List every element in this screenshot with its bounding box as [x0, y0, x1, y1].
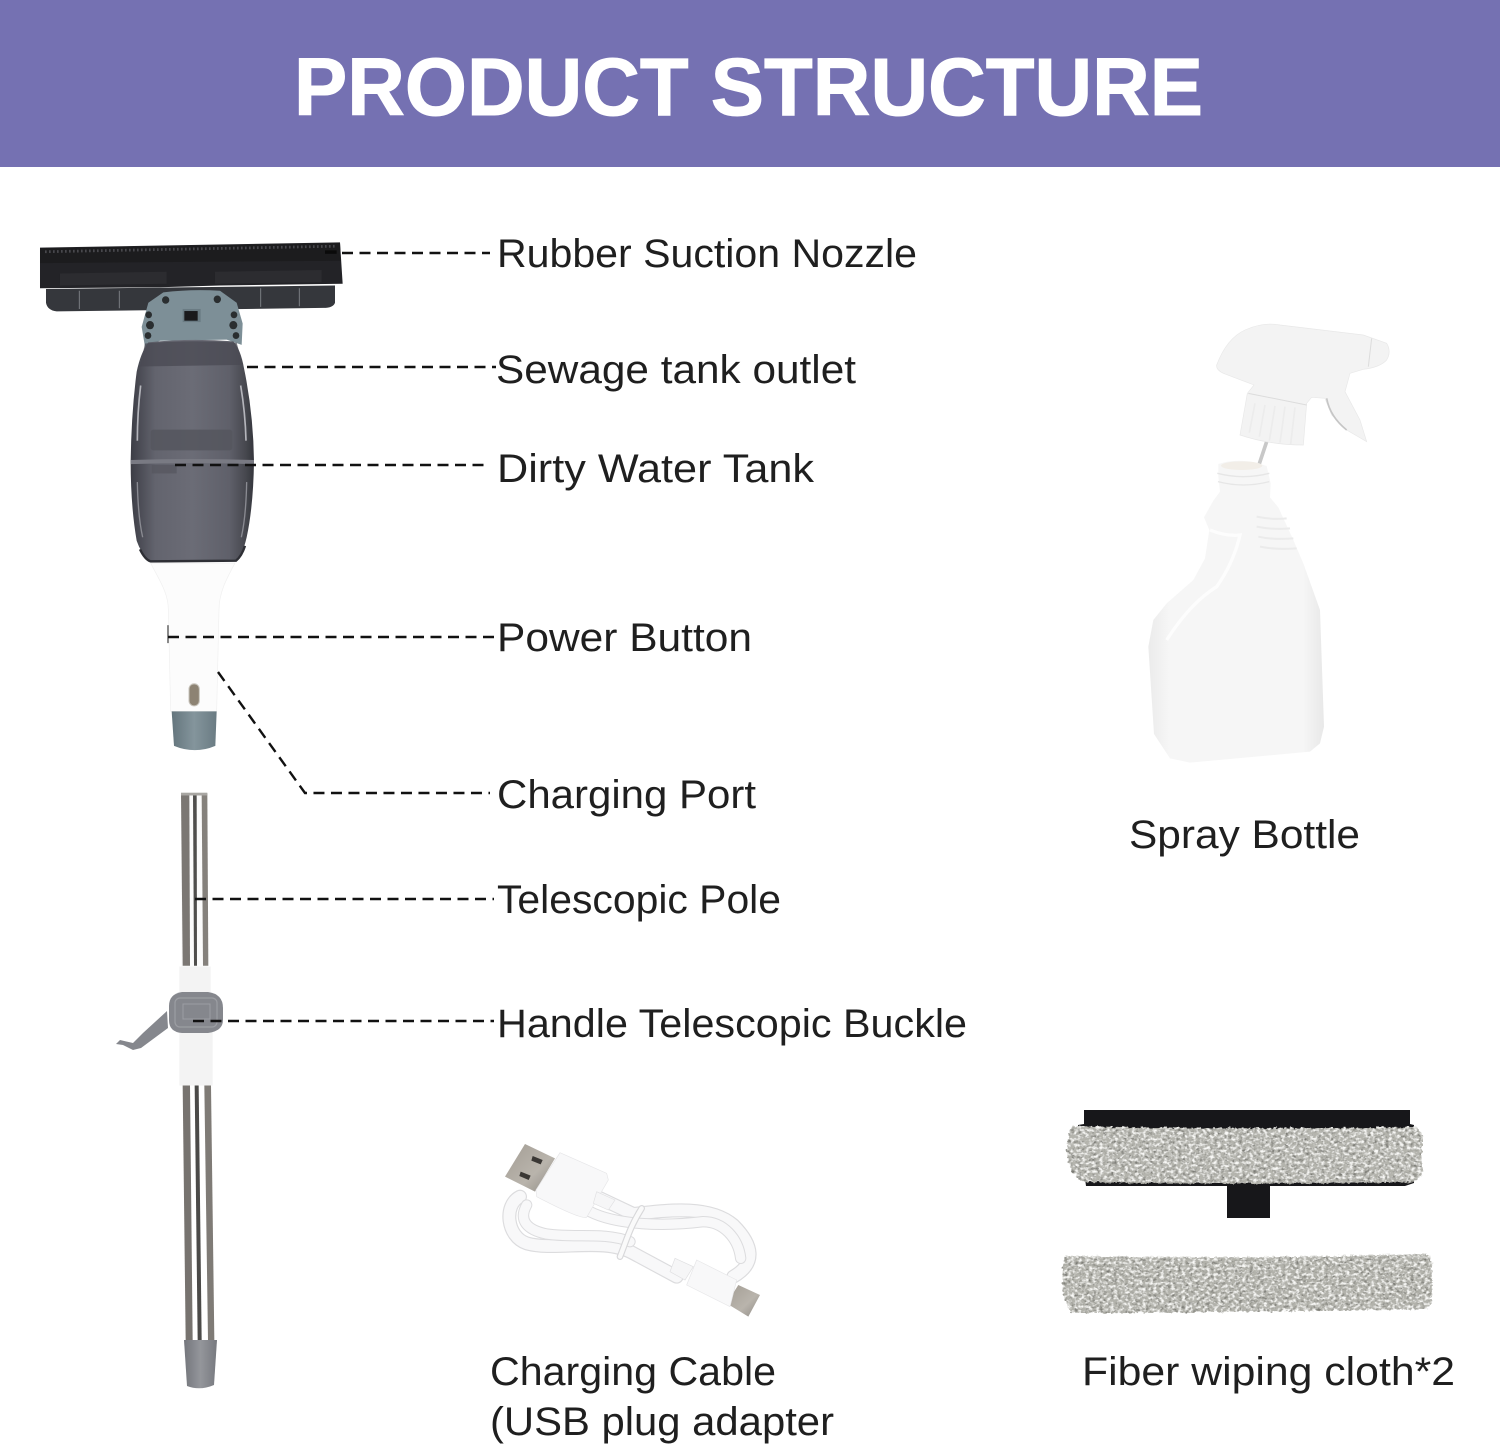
telescopic collars — [179, 967, 213, 1086]
label: charging cable: (USB plug adapter — [490, 1400, 834, 1444]
product: spare wiping cloth — [1062, 1254, 1432, 1313]
product: spray bottle — [1148, 324, 1389, 763]
dip tube — [1258, 442, 1267, 467]
label: rubber suction nozzle: Rubber Suction Nozzle — [497, 232, 917, 276]
product: charging cable — [505, 1144, 760, 1317]
dirty water tank — [131, 340, 254, 562]
handle end cap — [172, 711, 217, 750]
handle telescopic buckle — [169, 992, 223, 1033]
connector joint — [142, 290, 243, 347]
label: fiber wiping cloth: Fiber wiping cloth*2 — [1082, 1350, 1455, 1394]
label: power button: Power Button — [497, 616, 752, 660]
usb-c plug — [670, 1258, 760, 1317]
label: spray bottle: Spray Bottle — [1129, 813, 1360, 857]
label: charging port: Charging Port — [497, 773, 756, 817]
label: dirty water tank: Dirty Water Tank — [497, 447, 815, 491]
header banner — [0, 0, 1500, 167]
label: handle telescopic buckle: Handle Telescopic Buckle — [497, 1002, 967, 1046]
rubber suction nozzle — [40, 242, 343, 311]
label: telescopic pole: Telescopic Pole — [497, 878, 781, 922]
title: PRODUCT STRUCTURE — [294, 42, 1203, 133]
label: charging cable — [490, 1350, 834, 1444]
lever of telescopic buckle — [116, 1011, 168, 1050]
cable tie — [620, 1208, 642, 1257]
pole end cap — [184, 1340, 217, 1388]
charging port — [189, 684, 199, 706]
coiled cable — [509, 1197, 750, 1277]
trigger sprayer head — [1217, 324, 1389, 445]
leader lines — [168, 253, 496, 1021]
upper tube — [181, 793, 208, 967]
usb-a plug — [505, 1144, 615, 1217]
lower tube — [183, 1086, 214, 1340]
label: sewage tank outlet: Sewage tank outlet — [496, 348, 856, 392]
bottle body — [1148, 461, 1324, 763]
label: charging cable: Charging Cable — [490, 1350, 776, 1394]
product: telescopic pole — [179, 793, 214, 1340]
handle with power button — [151, 563, 235, 711]
product: window cleaner head and handle — [40, 242, 343, 750]
product: wiping cloth on black holder — [1067, 1110, 1422, 1218]
